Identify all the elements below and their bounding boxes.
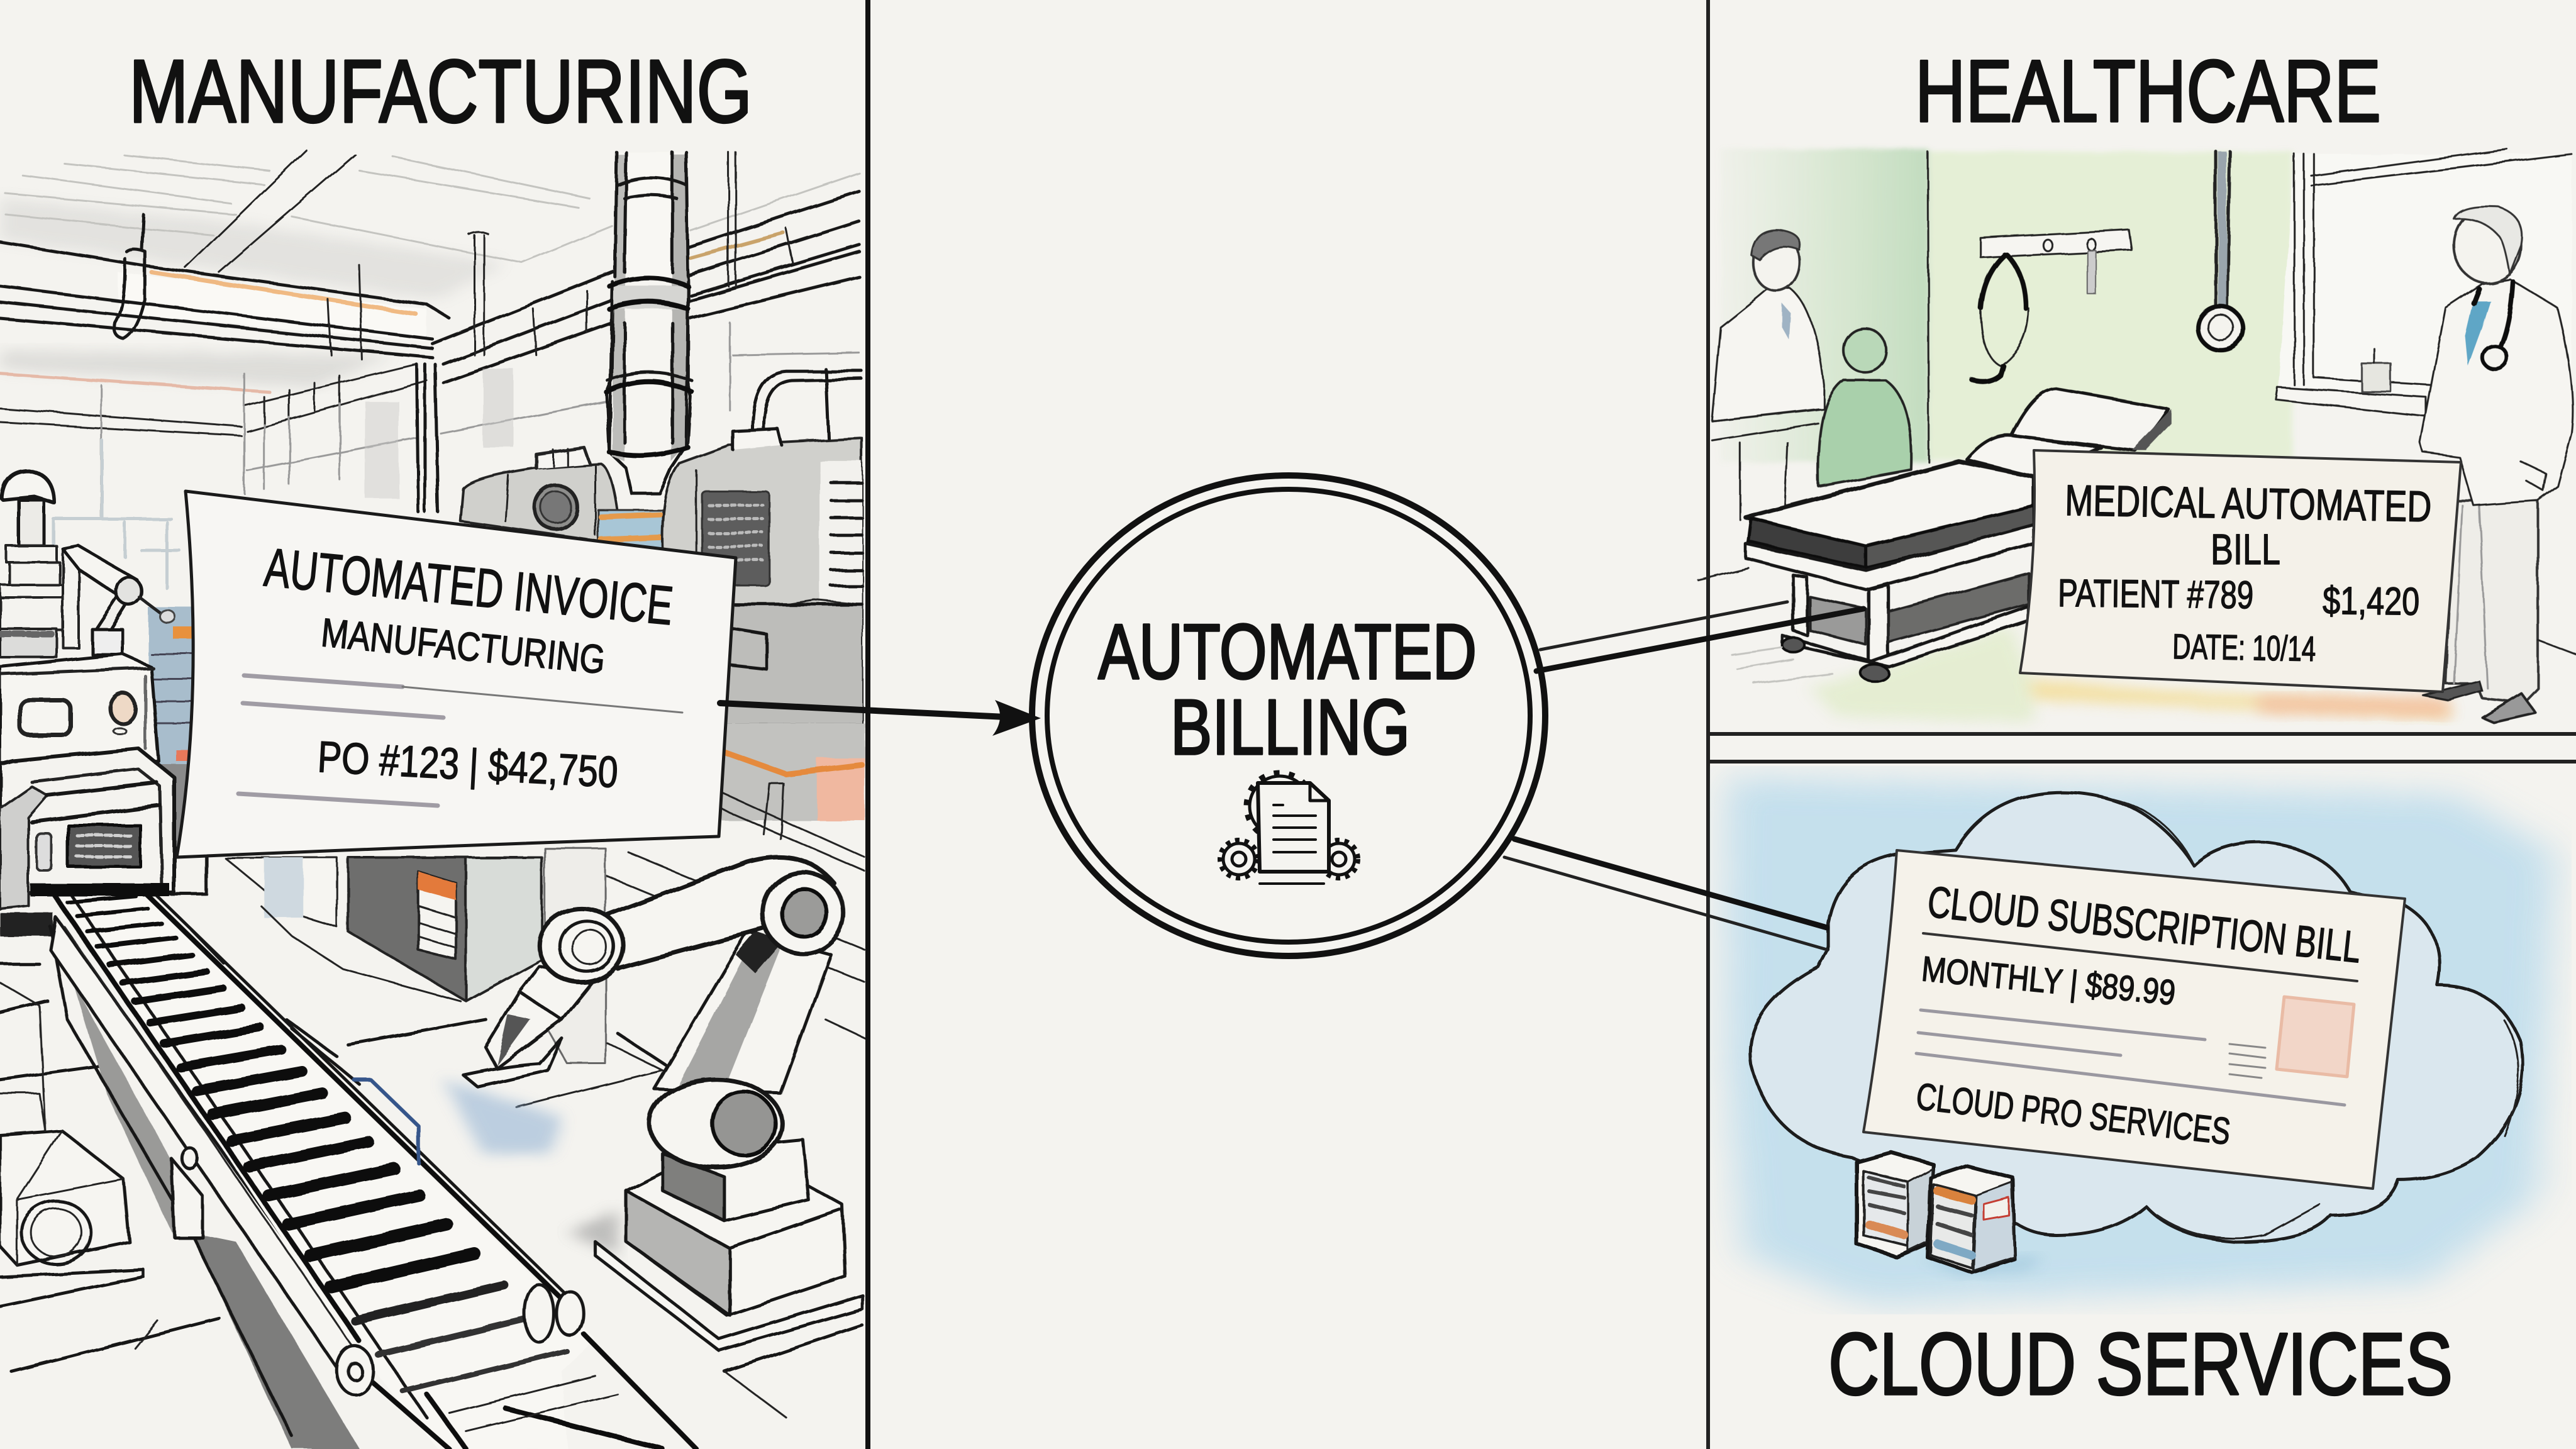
cloud bill title: CLOUD SUBSCRIPTION BILL: [1925, 877, 2363, 972]
central hub: automated billing: [1032, 475, 1545, 956]
arrow: manufacturing to hub: [720, 700, 1041, 736]
factory ceiling, ducts and machinery: [0, 150, 862, 723]
robot arm: [443, 857, 862, 1350]
panel: cloud services: [1726, 777, 2555, 1413]
patient number: PATIENT #789: [2058, 572, 2254, 617]
panel: healthcare: [1698, 42, 2576, 722]
panel: manufacturing: [0, 42, 865, 1449]
hub title line 2: BILLING: [1170, 684, 1410, 771]
bill title line 2: BILL: [2211, 525, 2280, 574]
left doctor: [1698, 230, 1824, 580]
hub title line 1: AUTOMATED: [1098, 609, 1477, 696]
right doctor: [2420, 207, 2576, 722]
rear cabinets: [225, 857, 337, 927]
cloud bill card: [1863, 850, 2405, 1189]
conveyor, robot arm and floor: [0, 723, 865, 1449]
conveyor frame: [73, 982, 186, 1237]
connector: hub to cloud services: [1504, 839, 1827, 950]
icon: document with gears: [1220, 773, 1358, 884]
conveyor slats: [67, 896, 136, 902]
invoice subtitle: MANUFACTURING: [319, 609, 607, 682]
connector: hub to healthcare: [1536, 602, 1863, 671]
camera unit: [0, 1131, 129, 1265]
hanging instrument: [2198, 152, 2243, 350]
medical bill card: [2020, 450, 2461, 692]
heading: manufacturing: MANUFACTURING: [129, 42, 752, 142]
wall rack and stethoscope: [1972, 230, 2132, 382]
green wall wash: [1929, 152, 2292, 460]
invoice card: [177, 491, 736, 857]
conveyor machine and small robot: [0, 440, 198, 909]
invoice title: AUTOMATED INVOICE: [262, 536, 675, 636]
window: [2276, 149, 2572, 416]
cloud illustration: [1726, 777, 2555, 1304]
factory illustration: [0, 150, 865, 1449]
cloud outline: [1750, 792, 2523, 1242]
servers: [1857, 1152, 2040, 1277]
blue wash: [1726, 777, 2555, 1304]
invoice details: PO #123 | $42,750: [316, 732, 619, 797]
clinic illustration: [1698, 149, 2576, 722]
floor lines: [0, 1001, 862, 1371]
vendor name: CLOUD PRO SERVICES: [1914, 1075, 2233, 1153]
bill title line 1: MEDICAL AUTOMATED: [2065, 476, 2432, 531]
billing frequency and price: MONTHLY | $89.99: [1920, 948, 2177, 1013]
date: DATE: 10/14: [2172, 626, 2316, 669]
pink stamp: [2277, 997, 2354, 1077]
process machines: [460, 464, 621, 544]
patient: [1818, 329, 1911, 486]
examination bed: [1731, 389, 2171, 684]
hub rings: [1032, 475, 1545, 956]
amount: $1,420: [2323, 579, 2420, 624]
exhaust stack: [606, 272, 691, 494]
heading: healthcare: HEALTHCARE: [1915, 42, 2381, 140]
